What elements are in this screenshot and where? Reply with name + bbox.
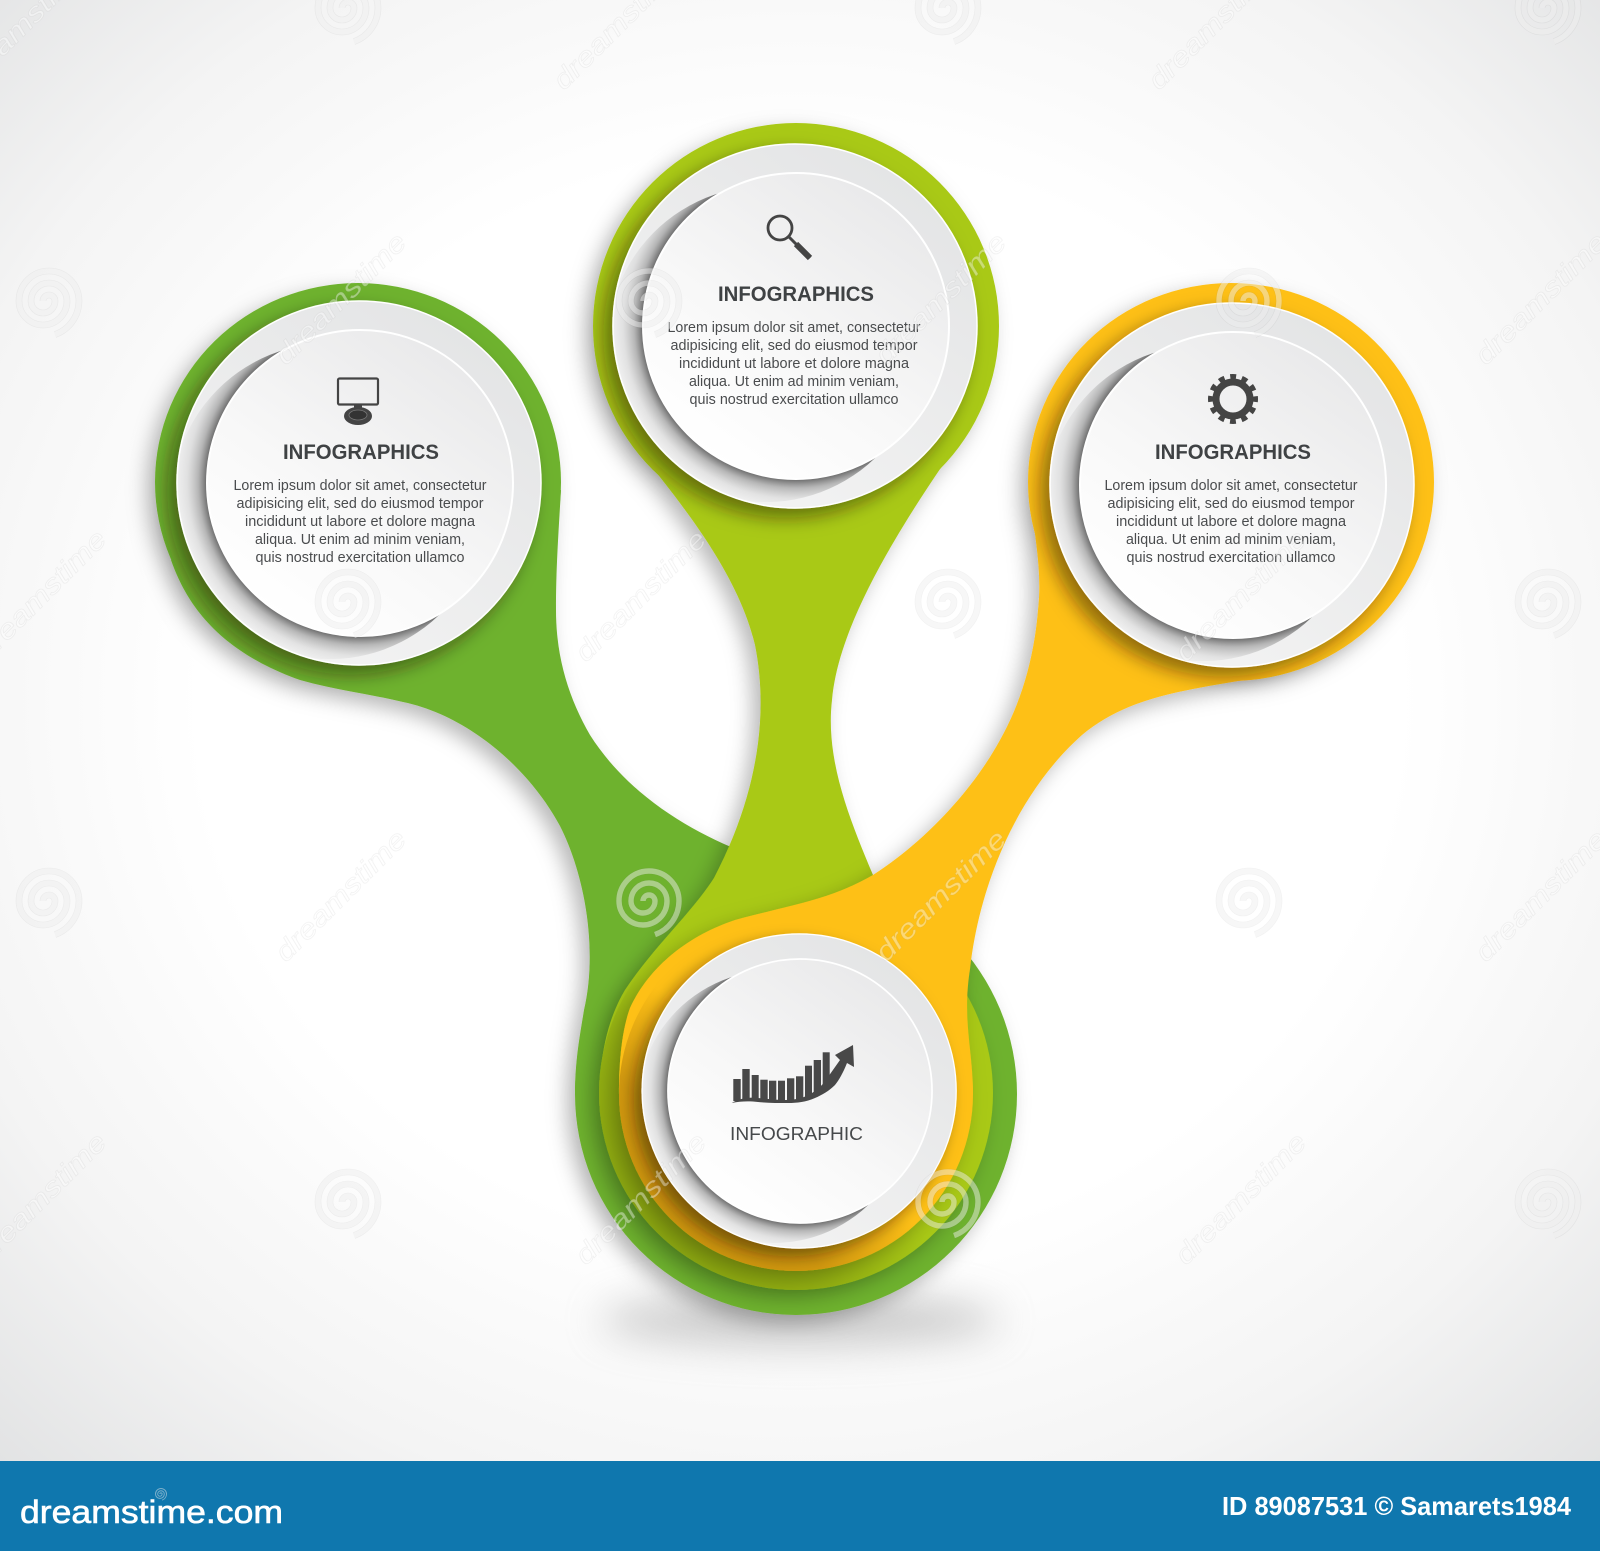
text block — [1104, 478, 1358, 566]
text block: incididunt ut labore et dolore magna — [1116, 514, 1346, 530]
disc — [637, 934, 956, 1248]
text block: Lorem ipsum dolor sit amet, consectetur — [234, 478, 487, 494]
branch: orange right arm — [619, 283, 1434, 1271]
panel: left monitor circle — [172, 301, 541, 665]
icon: magnifier — [768, 216, 810, 258]
watermark text: dreamstime — [569, 524, 712, 667]
watermark text: dreamstime — [869, 227, 1012, 370]
text block: aliqua. Ut enim ad minim veniam, — [1126, 532, 1336, 548]
text block: adipisicing elit, sed do eiusmod tempor — [236, 496, 484, 512]
text block: aliqua. Ut enim ad minim veniam, — [255, 532, 465, 548]
watermark text: dreamstime — [1169, 524, 1312, 667]
text block: quis nostrud exercitation ullamco — [256, 550, 465, 566]
text block: Lorem ipsum dolor sit amet, consectetur — [1104, 478, 1358, 494]
text block: aliqua. Ut enim ad minim veniam, — [689, 374, 899, 390]
text block: Lorem ipsum dolor sit amet, consectetur — [668, 320, 921, 336]
watermark text: dreamstime — [269, 824, 412, 967]
icon: gear — [1210, 376, 1256, 422]
text block — [234, 478, 487, 566]
watermark text: dreamstime — [869, 824, 1012, 967]
icon: rising bar chart with arrow — [732, 1045, 854, 1103]
watermark text: dreamstime — [1169, 1127, 1312, 1270]
text block: incididunt ut labore et dolore magna — [245, 514, 475, 530]
watermark spirals — [19, 0, 1578, 1236]
watermark text: dreamstime — [569, 1127, 712, 1270]
orange ring shading — [619, 917, 973, 1271]
heading: INFOGRAPHICS — [718, 282, 874, 306]
heading: INFOGRAPHICS — [283, 440, 439, 464]
text block: quis nostrud exercitation ullamco — [1126, 550, 1336, 566]
text block — [668, 320, 921, 408]
watermark text: dreamstime — [269, 227, 412, 370]
disc — [172, 301, 541, 665]
panel: right gear circle — [1045, 303, 1414, 667]
watermark text: dreamstime — [1469, 227, 1600, 370]
heading: INFOGRAPHICS — [1155, 440, 1311, 464]
disc — [1045, 303, 1414, 667]
lime ring shading — [599, 896, 993, 1290]
ground shadow — [600, 1294, 1000, 1346]
text block: quis nostrud exercitation ullamco — [690, 392, 899, 408]
branch: dark green left arm — [155, 283, 1017, 1315]
watermark text: dreamstime — [1469, 824, 1600, 967]
footer logo: dreamstime.com — [20, 1494, 283, 1530]
text block: adipisicing elit, sed do eiusmod tempor — [1108, 496, 1355, 512]
footer credit: ID 89087531 © Samarets1984 — [1222, 1491, 1572, 1521]
text block: incididunt ut labore et dolore magna — [679, 356, 909, 372]
footer bar — [0, 1461, 1600, 1551]
panel: centre search circle — [608, 144, 977, 508]
label: INFOGRAPHIC — [730, 1123, 863, 1144]
icon: monitor — [338, 378, 378, 425]
panel: bottom hub circle — [637, 934, 956, 1248]
text block: adipisicing elit, sed do eiusmod tempor — [670, 338, 918, 354]
branch: lime centre arm — [593, 123, 999, 1290]
disc — [608, 144, 977, 508]
